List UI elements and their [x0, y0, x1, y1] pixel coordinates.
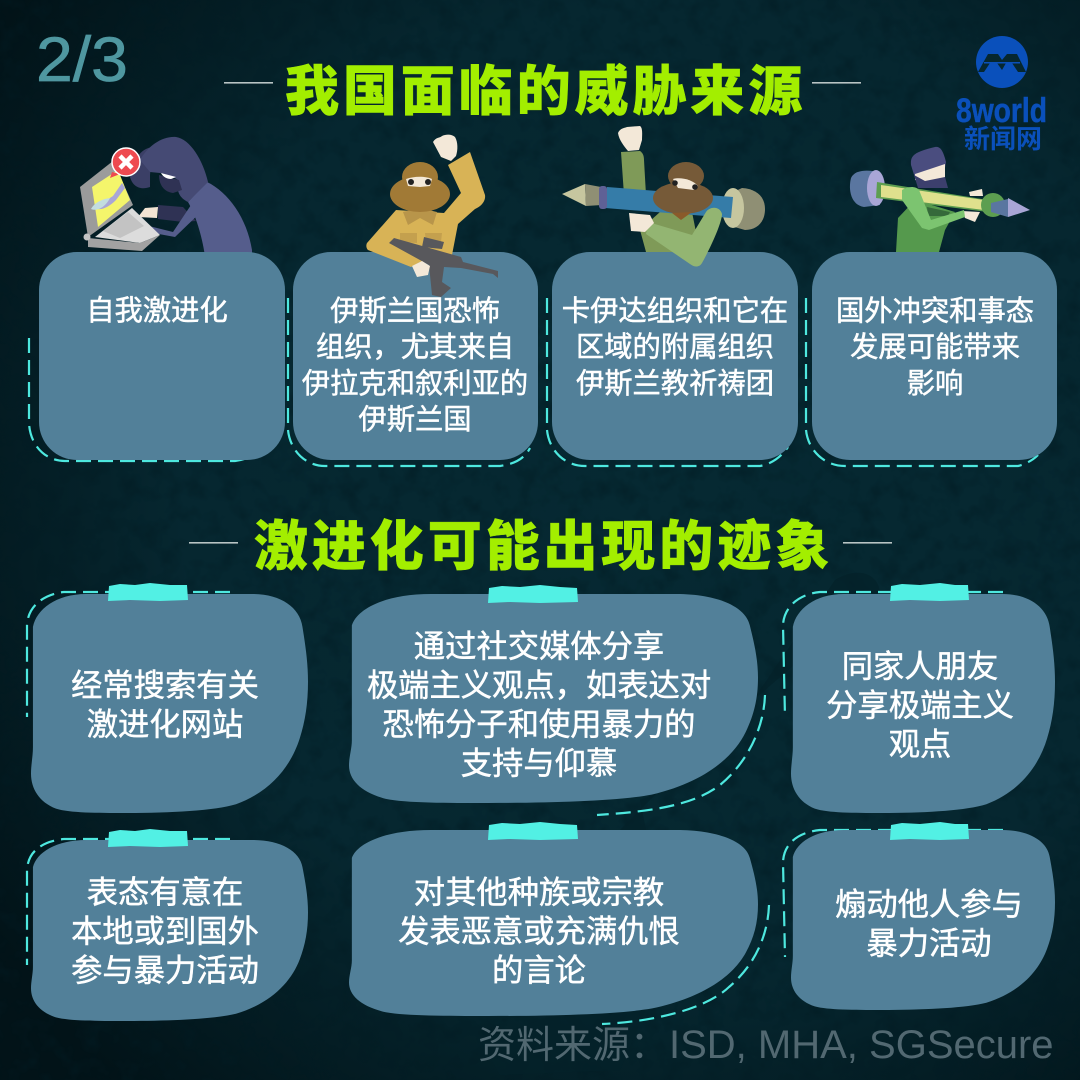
heading: signs of radicalisation: 激进化可能出现的迹象: [254, 517, 833, 577]
source note: [478, 1023, 1054, 1067]
card: searching radical sites: 经常搜索有关: [71, 668, 259, 703]
icon: soldier with green launcher body behind panel: [850, 147, 1030, 252]
logo: 8world: 8world: [956, 92, 1047, 130]
panel: overseas conflict: 国外冲突和事态: [836, 294, 1034, 326]
logo: 8world: [956, 36, 1047, 154]
card: hate speech: 发表恶意或充满仇恨: [398, 914, 680, 949]
card: sharing with family: 同家人朋友: [842, 649, 998, 684]
source note: ISD, MHA, SGSecure: [669, 1023, 1054, 1067]
panel: Al-Qaeda: 区域的附属组织: [576, 330, 774, 362]
source note: 资料来源：: [478, 1025, 668, 1067]
card: intent to join violence: 参与暴力活动: [71, 953, 259, 988]
card: sharing on social media: 通过社交媒体分享: [414, 629, 664, 664]
logo: 8world: 新闻网: [964, 124, 1042, 154]
card: hate speech: 的言论: [492, 953, 586, 988]
panel: Islamic State: 伊斯兰国: [358, 403, 472, 435]
heading: threat sources: 我国面临的威胁来源: [285, 62, 806, 122]
panel: Al-Qaeda: [547, 252, 798, 466]
card: intent to join violence: 本地或到国外: [71, 914, 259, 949]
card: searching radical sites: [27, 583, 308, 813]
icon: soldier with bazooka body behind panel: [562, 126, 765, 252]
card: inciting violence: [783, 822, 1055, 1010]
panel: Al-Qaeda: 伊斯兰教祈祷团: [576, 367, 774, 399]
card: sharing on social media: 极端主义观点，如表达对: [367, 668, 711, 703]
card: sharing on social media: 恐怖分子和使用暴力的: [383, 707, 695, 742]
card: hate speech: 对其他种族或宗教: [414, 875, 664, 910]
panel: overseas conflict: 发展可能带来: [850, 330, 1020, 362]
panel: Islamic State: 伊拉克和叙利亚的: [302, 367, 528, 399]
panel: self-radicalisation: 自我激进化: [86, 294, 228, 326]
card: intent to join violence: [27, 829, 308, 1021]
page number: 2/3: [36, 25, 128, 95]
card: sharing on social media: 支持与仰慕: [461, 746, 617, 781]
card: sharing on social media: [349, 585, 765, 815]
card: sharing with family: [783, 583, 1055, 813]
panel: self-radicalisation: [29, 252, 285, 461]
card: searching radical sites: 激进化网站: [87, 707, 243, 742]
icon: hacker at laptop (body behind panel): [80, 137, 252, 256]
icon: soldier with rifle: [366, 135, 498, 297]
card: sharing with family: 分享极端主义: [826, 688, 1014, 723]
panel: Islamic State: 伊斯兰国恐怖: [330, 294, 500, 326]
card: sharing with family: 观点: [889, 727, 951, 762]
panel: overseas conflict: [806, 252, 1057, 466]
card: inciting violence: 煽动他人参与: [835, 887, 1023, 922]
card: hate speech: [349, 822, 769, 1024]
icon: raised-arm front of bazooka soldier: [629, 162, 722, 266]
panel: Islamic State: [288, 252, 538, 466]
panel: overseas conflict: 影响: [907, 367, 963, 399]
card: intent to join violence: 表态有意在: [87, 875, 243, 910]
panel: Islamic State: 组织，尤其来自: [316, 330, 514, 362]
card: inciting violence: 暴力活动: [866, 926, 992, 961]
panel: Al-Qaeda: 卡伊达组织和它在: [562, 294, 788, 326]
